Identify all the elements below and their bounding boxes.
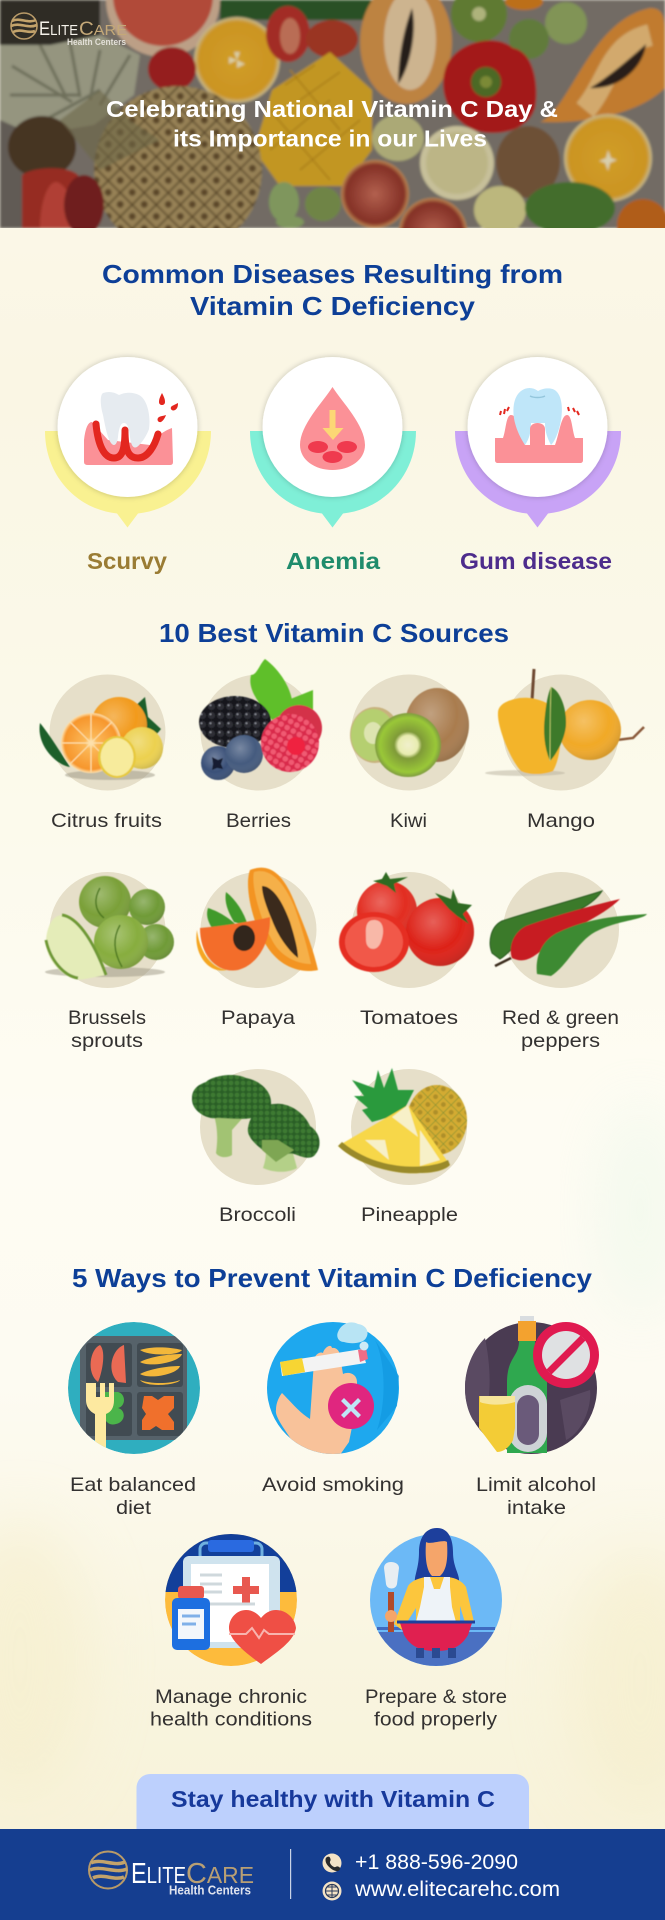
label: Manage chronic [155,1686,307,1708]
fruit photo collage [0,0,665,228]
icon: woman cooking [370,1528,502,1666]
logo: Elite Care: ELITE [39,19,78,40]
call to action: stay healthy: Stay healthy with Vitamin C [171,1786,495,1812]
heading: common diseases [102,259,563,321]
food: broccoli [192,1069,320,1226]
title: Celebrating National Vitamin C Day & [106,96,558,122]
food: brussels sprouts: sprouts [71,1030,143,1052]
food: red and green peppers: peppers [521,1030,600,1052]
tip: prepare and store food properly [365,1528,507,1730]
icon: bottle with no sign [465,1316,599,1454]
label: Eat balanced [70,1474,196,1496]
tip: eat balanced diet: diet [116,1497,152,1519]
label: Kiwi [390,810,427,832]
tip: limit alcohol intake [465,1316,599,1519]
logo: Elite Care: CARE [79,19,127,40]
label: Prepare & store [365,1686,507,1708]
food: brussels sprouts [45,872,174,1052]
logo: Elite Care footer: Health Centers [169,1882,251,1898]
label: Limit alcohol [476,1474,596,1496]
heading: common diseases: Common Diseases Resulting from [102,259,563,289]
purple badge ring [455,431,621,528]
brussels sprouts image [45,876,174,980]
header banner: fruit photo with title [0,0,665,228]
logo: Elite Care footer [89,1852,254,1898]
call to action: stay healthy [136,1774,529,1829]
icon: globe [322,1882,342,1900]
food: mango [485,669,644,832]
label: Red & green [502,1007,619,1029]
logo: Elite Care: Health Centers [67,37,126,47]
icon: medical case, bottle and heart [165,1534,297,1666]
label: Brussels [68,1007,146,1029]
tip: manage chronic health conditions [150,1534,312,1730]
title: its Importance in our Lives [173,126,487,152]
website: www.elitecarehc.com [354,1878,560,1901]
icon: blood drop [300,387,365,470]
label: Broccoli [219,1204,296,1226]
label: Berries [226,810,291,832]
title [106,96,558,152]
berries image [199,659,322,780]
tip: prepare and store food properly: food properly [374,1708,497,1730]
mango image [485,669,644,776]
label: Mango [527,810,595,832]
label: Citrus fruits [51,810,162,832]
label: anemia: Anemia [286,548,380,574]
yellow badge ring [45,431,211,528]
label: scurvy: Scurvy [87,548,167,574]
heading: common diseases: Vitamin C Deficiency [190,291,476,321]
food: red and green peppers [490,872,647,1052]
icon: phone [322,1854,342,1872]
label: Avoid smoking [262,1474,404,1496]
footer [0,1829,665,1920]
icon: bleeding tooth [84,392,178,465]
dark overlay [0,0,665,228]
tip: manage chronic health conditions: health conditions [150,1708,312,1730]
icon: receding gums tooth [495,388,583,463]
food: tomatoes [339,872,474,1029]
icon: cigarette in hand with cross [267,1322,399,1454]
heading: vitamin C sources: 10 Best Vitamin C Sources [159,618,509,648]
heading: prevention: 5 Ways to Prevent Vitamin C Deficiency [72,1263,593,1293]
phone number: +1 888-596-2090 [355,1851,518,1874]
pineapple image [338,1068,467,1173]
tip: limit alcohol intake: intake [507,1497,566,1519]
broccoli image [192,1075,320,1172]
food: papaya [196,868,318,1029]
icon: meal tray [68,1322,200,1454]
label: Papaya [221,1007,295,1029]
panel: gum disease [455,357,621,528]
label: Tomatoes [360,1007,458,1029]
tomatoes image [339,872,474,972]
logo: Elite Care [11,13,127,47]
tip: eat balanced diet [68,1322,200,1519]
logo: Elite Care footer: ELITE [131,1858,186,1890]
teal badge ring [250,431,416,528]
tip: avoid smoking [262,1322,404,1496]
food: citrus fruits [39,674,165,832]
food: pineapple [338,1068,467,1226]
panel: anemia [250,357,416,528]
logo: Elite Care footer: CARE [186,1858,254,1890]
papaya image [196,868,318,971]
peppers image [490,891,647,976]
label: Pineapple [361,1204,458,1226]
kiwi image [350,688,469,777]
label: gum disease: Gum disease [460,548,612,574]
food: kiwi [350,674,469,832]
panel: scurvy [45,357,211,528]
citrus image [39,697,163,780]
food: berries [199,659,322,832]
